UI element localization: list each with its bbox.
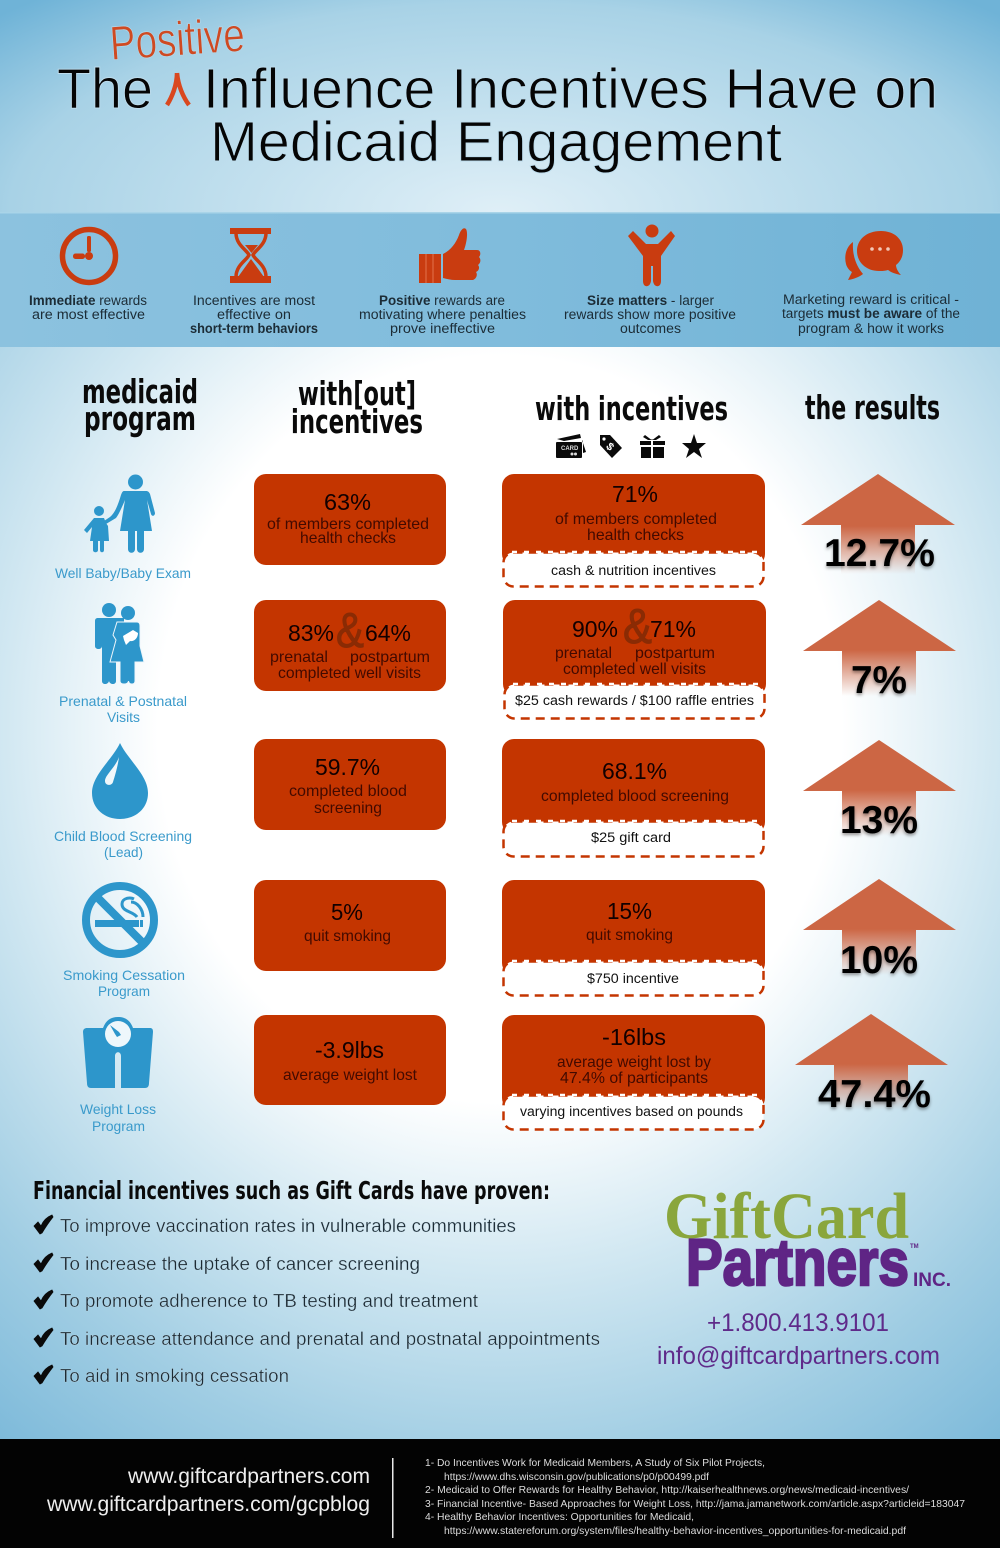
takeaway text 3 bbox=[359, 293, 526, 336]
references: 1- Do Incentives Work for Medicaid Members, A Study of Six Pilot Projects, bbox=[425, 1457, 765, 1469]
title: The bbox=[57, 57, 153, 121]
icon: clock bbox=[62, 230, 116, 282]
inserted word: Positive: Positive bbox=[108, 9, 246, 71]
icon: cards bbox=[556, 434, 586, 458]
takeaway text 4: Size matters - larger bbox=[587, 293, 715, 308]
without incentives card bbox=[254, 739, 446, 830]
with incentives card: 71% bbox=[612, 481, 658, 507]
takeaway text 3: Positive rewards are bbox=[379, 293, 505, 308]
check item 5: To aid in smoking cessation bbox=[60, 1365, 289, 1386]
label: Well Baby/Baby Exam bbox=[55, 565, 191, 581]
row 5: weight loss bbox=[80, 1014, 948, 1134]
with incentives card bbox=[502, 1015, 765, 1130]
logo: GiftCard Partners: GiftCard bbox=[664, 1180, 909, 1253]
icon: hourglass bbox=[230, 228, 271, 283]
row 1: well baby bbox=[55, 474, 955, 586]
takeaway text 4: rewards show more positive bbox=[564, 307, 736, 322]
with incentives card bbox=[503, 600, 766, 718]
check item 1: To improve vaccination rates in vulnerable communities bbox=[60, 1215, 516, 1236]
label: Child Blood Screening bbox=[54, 828, 192, 844]
takeaway text 1 bbox=[29, 293, 147, 322]
contact phone: +1.800.413.9101 bbox=[707, 1309, 889, 1337]
with incentives card: quit smoking bbox=[586, 927, 673, 944]
references bbox=[425, 1457, 965, 1537]
label bbox=[59, 693, 187, 725]
label: Program bbox=[92, 1118, 145, 1134]
references: https://www.statereforum.org/system/files/healthy-behavior-incentives_opportunities-for-medicaid.pdf bbox=[444, 1525, 906, 1537]
with incentives card: 15% bbox=[607, 898, 652, 924]
caret mark bbox=[167, 73, 189, 105]
result arrow bbox=[801, 474, 955, 575]
takeaway text 2: Incentives are most bbox=[193, 293, 315, 308]
website links: www.giftcardpartners.com bbox=[127, 1465, 370, 1488]
column heading: with incentives: with incentives bbox=[535, 389, 728, 428]
row 4: smoking cessation bbox=[63, 879, 956, 999]
result arrow bbox=[803, 600, 956, 702]
icon: blood drop bbox=[92, 743, 148, 819]
takeaway text 1: Immediate rewards bbox=[29, 293, 147, 308]
column heading: medicaid program bbox=[82, 372, 198, 438]
panel: key takeaways band bbox=[0, 212, 1000, 347]
with incentives card: $25 cash rewards / $100 raffle entries bbox=[515, 693, 754, 708]
takeaway text 2 bbox=[190, 293, 318, 336]
contact email: info@giftcardpartners.com bbox=[657, 1342, 940, 1370]
without incentives card: prenatal bbox=[270, 649, 328, 666]
without incentives card: 59.7% bbox=[315, 754, 380, 780]
icon: star bbox=[682, 434, 706, 458]
with incentives card: $25 gift card bbox=[591, 830, 671, 845]
label: Weight Loss bbox=[80, 1101, 156, 1117]
result arrow bbox=[803, 879, 956, 982]
with incentives card: varying incentives based on pounds bbox=[520, 1104, 743, 1119]
column heading: without incentives: with[out] bbox=[298, 374, 416, 413]
with incentives card: 68.1% bbox=[602, 758, 667, 784]
icon: cards: CARD bbox=[561, 446, 579, 452]
result arrow: 47.4% bbox=[818, 1073, 931, 1116]
takeaway text 5: program & how it works bbox=[798, 321, 944, 336]
result arrow bbox=[803, 740, 956, 842]
label bbox=[63, 967, 185, 999]
without incentives card: average weight lost bbox=[283, 1067, 418, 1084]
takeaway text 4: outcomes bbox=[620, 321, 681, 336]
without incentives card: 63% bbox=[324, 489, 371, 515]
result arrow: 7% bbox=[851, 659, 907, 702]
without incentives card bbox=[254, 600, 446, 691]
with incentives card: prenatal bbox=[555, 645, 612, 662]
icon: bathroom scale bbox=[83, 1017, 153, 1088]
icon: parent and child bbox=[84, 474, 155, 553]
icon: family with baby bbox=[95, 603, 144, 684]
title: Influence Incentives Have on bbox=[203, 57, 938, 121]
with incentives card: 90% bbox=[572, 616, 618, 642]
without incentives card: of members completed bbox=[267, 516, 429, 533]
takeaway text 3: prove ineffective bbox=[390, 321, 495, 336]
icon: no smoking bbox=[86, 886, 154, 954]
with incentives card: postpartum bbox=[635, 645, 715, 662]
references: https://www.dhs.wisconsin.gov/publications/p0/p00499.pdf bbox=[444, 1471, 709, 1483]
takeaway text 4 bbox=[564, 293, 736, 336]
header background bbox=[0, 0, 1000, 212]
takeaway text 1: are most effective bbox=[32, 307, 145, 322]
with incentives card: 71% bbox=[650, 616, 696, 642]
check item 3: To promote adherence to TB testing and treatment bbox=[60, 1290, 478, 1311]
icon: speech bubbles bbox=[845, 231, 903, 280]
logo: GiftCard Partners bbox=[664, 1180, 951, 1299]
takeaway text 5: targets must be aware of the bbox=[782, 306, 960, 321]
with incentives card: & bbox=[623, 600, 652, 654]
with incentives card: completed well visits bbox=[563, 661, 706, 678]
with incentives card: $750 incentive bbox=[587, 971, 679, 986]
icon: thumbs up bbox=[419, 228, 480, 283]
result arrow: 12.7% bbox=[824, 532, 935, 575]
without incentives card: health checks bbox=[300, 530, 396, 547]
icon: person with raised arms bbox=[628, 224, 675, 286]
title: Medicaid Engagement bbox=[210, 110, 782, 174]
with incentives card: cash & nutrition incentives bbox=[551, 563, 716, 578]
without incentives card bbox=[254, 474, 446, 565]
footer bbox=[0, 1439, 1000, 1548]
column heading: without incentives: incentives bbox=[291, 402, 423, 441]
icon: price tag bbox=[600, 435, 622, 458]
label: Smoking Cessation bbox=[63, 967, 185, 983]
icon: gift box bbox=[640, 435, 665, 458]
result arrow: 13% bbox=[840, 799, 918, 842]
without incentives card: 5% bbox=[331, 899, 363, 925]
without incentives card: -3.9lbs bbox=[315, 1037, 384, 1063]
takeaway text 3: motivating where penalties bbox=[359, 307, 526, 322]
references: 3- Financial Incentive- Based Approaches for Weight Loss, http://jama.jamanetwork.com/article.aspx?articleid=183047 bbox=[425, 1498, 965, 1510]
without incentives card: completed blood bbox=[289, 783, 407, 800]
logo: GiftCard Partners: Partners bbox=[686, 1225, 909, 1299]
with incentives card bbox=[502, 880, 765, 996]
takeaway text 2: short-term behaviors bbox=[190, 321, 318, 336]
without incentives card: 83% bbox=[288, 620, 334, 646]
without incentives card bbox=[254, 1015, 446, 1105]
main background bbox=[0, 347, 1000, 1439]
label bbox=[54, 828, 192, 860]
without incentives card bbox=[254, 880, 446, 971]
without incentives card: screening bbox=[314, 800, 382, 817]
with incentives card bbox=[502, 474, 765, 586]
column heading: medicaid program: medicaid bbox=[82, 372, 198, 411]
row 2: prenatal and postnatal bbox=[59, 600, 956, 725]
with incentives card: health checks bbox=[587, 527, 684, 544]
panel: financial incentives list bbox=[33, 1176, 600, 1386]
website links: www.giftcardpartners.com/gcpblog bbox=[46, 1493, 370, 1516]
without incentives card: quit smoking bbox=[304, 928, 391, 945]
with incentives card: of members completed bbox=[555, 511, 717, 528]
with incentives card bbox=[502, 739, 765, 856]
without incentives card: postpartum bbox=[350, 649, 430, 666]
incentive icons row bbox=[556, 434, 706, 458]
takeaway text 5: Marketing reward is critical - bbox=[783, 292, 959, 307]
with incentives card: 47.4% of participants bbox=[560, 1070, 708, 1087]
row 3: child blood screening bbox=[54, 739, 956, 860]
website links bbox=[46, 1465, 370, 1516]
label bbox=[80, 1101, 156, 1134]
result arrow: 10% bbox=[840, 939, 918, 982]
column heading: medicaid program: program bbox=[84, 399, 196, 438]
takeaway text 5 bbox=[782, 292, 960, 336]
check item 2: To increase the uptake of cancer screening bbox=[60, 1253, 420, 1274]
label: (Lead) bbox=[104, 844, 143, 860]
logo: GiftCard Partners: INC. bbox=[913, 1270, 951, 1291]
with incentives card: completed blood screening bbox=[541, 788, 729, 805]
check item 4: To increase attendance and prenatal and postnatal appointments bbox=[60, 1328, 600, 1349]
column heading: without incentives bbox=[291, 374, 423, 441]
label: Program bbox=[98, 983, 150, 999]
label: Visits bbox=[107, 709, 140, 725]
icon: price tag: $ bbox=[603, 441, 616, 453]
references: 2- Medicaid to Offer Rewards for Healthy Behavior, http://kaiserhealthnews.org/news/medicaid-incentives/ bbox=[425, 1484, 909, 1496]
takeaway text 2: effective on bbox=[217, 307, 291, 322]
references: 4- Healthy Behavior Incentives: Opportunities for Medicaid, bbox=[425, 1511, 694, 1523]
with incentives card: -16lbs bbox=[602, 1024, 666, 1050]
with incentives card: average weight lost by bbox=[557, 1054, 711, 1071]
without incentives card: 64% bbox=[365, 620, 411, 646]
title bbox=[57, 9, 938, 174]
without incentives card: & bbox=[336, 604, 364, 658]
result arrow bbox=[795, 1014, 948, 1116]
without incentives card: completed well visits bbox=[278, 665, 421, 682]
label: Prenatal & Postnatal bbox=[59, 693, 187, 709]
logo: GiftCard Partners: TM bbox=[910, 1244, 919, 1250]
heading: Financial incentives such as Gift Cards have proven: bbox=[33, 1176, 550, 1205]
